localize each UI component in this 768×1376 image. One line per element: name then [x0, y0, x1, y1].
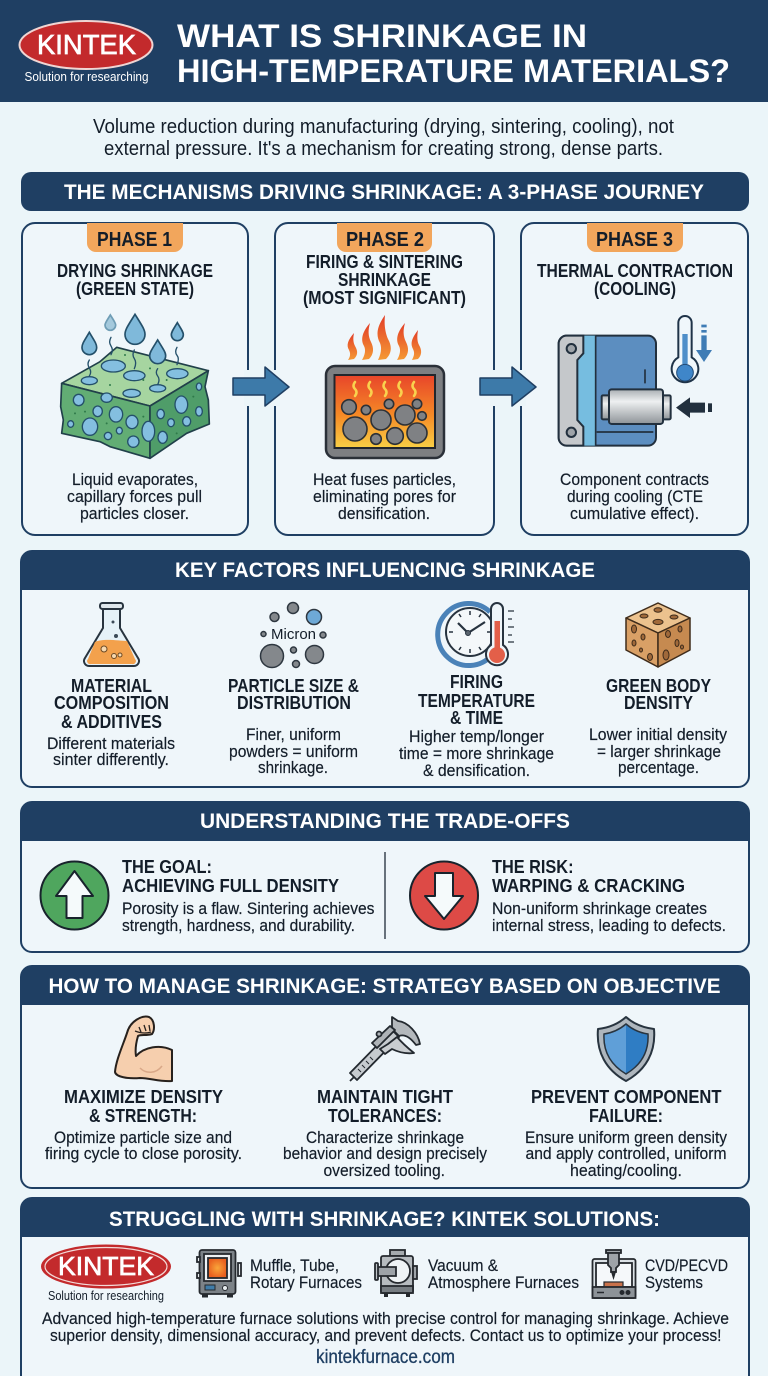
- product label: [645, 1256, 728, 1292]
- goal text: Porosity is a flaw. Sintering achieves: [122, 900, 374, 918]
- strategy text: FAILURE:: [589, 1106, 663, 1126]
- product label: [250, 1256, 362, 1292]
- phase 1 tag: [87, 223, 183, 252]
- risk text: Non-uniform shrinkage creates: [492, 900, 707, 918]
- strategy text: [283, 1087, 488, 1180]
- icon: clock and thermometer: [438, 603, 514, 666]
- icon: down arrow: [410, 862, 478, 930]
- logo: KINTEK small: [41, 1244, 171, 1303]
- product: CVD system: [592, 1250, 728, 1298]
- phase 2 description: eliminating pores for: [313, 488, 456, 506]
- factor text: TEMPERATURE: [418, 691, 535, 711]
- panel: phase 2: [275, 223, 494, 535]
- the risk: [410, 857, 726, 935]
- phase 2 tag: [337, 223, 432, 252]
- phase 3 heading: THERMAL CONTRACTION: [537, 261, 733, 281]
- section heading: mechanisms: [21, 172, 749, 211]
- trade-offs heading: UNDERSTANDING THE TRADE-OFFS: [200, 810, 570, 833]
- strategy: tight tolerances: [283, 1017, 488, 1180]
- logo: KINTEK: Solution for researching: [24, 70, 149, 84]
- strategy text: PREVENT COMPONENT: [531, 1087, 722, 1107]
- strategy text: & STRENGTH:: [89, 1106, 197, 1126]
- phase 1 heading: [57, 261, 213, 299]
- factor text: Different materials: [47, 735, 175, 753]
- strategy text: behavior and design precisely: [283, 1145, 488, 1163]
- product label: Systems: [645, 1273, 703, 1292]
- key factors heading: [21, 551, 749, 590]
- strategy text: firing cycle to close porosity.: [45, 1145, 242, 1163]
- icon: flexed arm: [115, 1017, 172, 1081]
- intro text: [93, 116, 674, 160]
- factor text: Lower initial density: [589, 726, 728, 744]
- title: HIGH-TEMPERATURE MATERIALS?: [177, 53, 730, 89]
- phase 3 description: during cooling (CTE: [567, 488, 703, 506]
- factor: green body density: [589, 603, 728, 777]
- icon: muffle furnace: [197, 1250, 241, 1298]
- icon: shield: [598, 1017, 654, 1081]
- phase 2 heading: FIRING & SINTERING: [306, 252, 463, 272]
- phase 3 tag: PHASE 3: [596, 229, 673, 251]
- strategy text: oversized tooling.: [324, 1162, 445, 1180]
- product label: CVD/PECVD: [645, 1256, 728, 1275]
- arrow: phase 2 to phase 3: [480, 367, 536, 406]
- solutions heading: [21, 1198, 749, 1237]
- strategy text: Optimize particle size and: [54, 1129, 232, 1147]
- factor text: = larger shrinkage: [597, 743, 721, 761]
- website link: kintekfurnace.com: [316, 1347, 455, 1368]
- icon: cooling component: [559, 316, 712, 446]
- logo: KINTEK: KINTEK: [37, 29, 136, 60]
- factor text: & densification.: [423, 762, 530, 780]
- intro text: Volume reduction during manufacturing (drying, sintering, cooling), not: [93, 116, 674, 138]
- factor text: & ADDITIVES: [61, 712, 162, 732]
- factor text: DENSITY: [624, 693, 693, 713]
- factor text: PARTICLE SIZE &: [228, 676, 359, 696]
- product label: Rotary Furnaces: [250, 1273, 362, 1292]
- factor text: [589, 676, 728, 777]
- risk text: [492, 857, 726, 935]
- phase 1 description: [67, 471, 202, 523]
- phase 1 heading: (GREEN STATE): [76, 279, 194, 299]
- logo: KINTEK: [20, 21, 152, 84]
- panel: KINTEK solutions: [21, 1198, 749, 1376]
- the goal: [40, 857, 374, 935]
- strategy text: heating/cooling.: [570, 1162, 682, 1180]
- factor text: [399, 672, 554, 780]
- icon: vacuum furnace: [375, 1250, 417, 1297]
- product: muffle furnace: [197, 1250, 362, 1298]
- factor text: shrinkage.: [258, 759, 328, 777]
- phase 2 heading: [303, 252, 466, 308]
- icon: particles: Micron: [271, 626, 316, 643]
- factor: firing temperature: [399, 603, 554, 780]
- strategy text: Ensure uniform green density: [525, 1129, 728, 1147]
- phase 2 description: [313, 471, 456, 523]
- phase 1 description: Liquid evaporates,: [72, 471, 198, 489]
- strategy text: Characterize shrinkage: [306, 1129, 464, 1147]
- icon: kiln with particles: [326, 366, 444, 458]
- factor: particle size: [228, 602, 359, 777]
- product label: [428, 1256, 579, 1292]
- phase 3 description: cumulative effect).: [570, 505, 699, 523]
- factor text: FIRING: [450, 672, 503, 692]
- phase 1 description: capillary forces pull: [67, 488, 202, 506]
- title: [177, 18, 730, 89]
- risk text: THE RISK:: [492, 857, 574, 877]
- product label: Muffle, Tube,: [250, 1256, 339, 1275]
- phase 3 tag: [587, 223, 683, 252]
- goal text: ACHIEVING FULL DENSITY: [122, 876, 339, 896]
- product label: Atmosphere Furnaces: [428, 1273, 579, 1292]
- factor text: [228, 676, 359, 777]
- strategy: prevent failure: [525, 1017, 728, 1180]
- strategy text: MAINTAIN TIGHT: [317, 1087, 453, 1107]
- phase 2 tag: PHASE 2: [346, 229, 424, 251]
- risk text: internal stress, leading to defects.: [492, 917, 726, 935]
- factor text: powders = uniform: [229, 743, 358, 761]
- strategy: density and strength: [45, 1017, 242, 1163]
- product: vacuum furnace: [375, 1250, 579, 1297]
- strategy text: TOLERANCES:: [328, 1106, 442, 1126]
- solutions description: Advanced high-temperature furnace solutions with precise control for managing shrinkage. Achieve: [42, 1310, 729, 1328]
- managing heading: HOW TO MANAGE SHRINKAGE: STRATEGY BASED ON OBJECTIVE: [48, 975, 720, 998]
- factor text: COMPOSITION: [54, 693, 169, 713]
- panel: phase 1: [22, 223, 248, 535]
- panel: trade-offs: [21, 802, 749, 952]
- icon: CVD system: [592, 1250, 636, 1298]
- logo: KINTEK small: KINTEK: [58, 1251, 155, 1281]
- phase 2 heading: (MOST SIGNIFICANT): [303, 288, 466, 308]
- phase 2 heading: SHRINKAGE: [338, 270, 431, 290]
- icon: particles: [260, 602, 326, 668]
- factor: material composition: [47, 603, 175, 769]
- phase 1 description: particles closer.: [80, 505, 189, 523]
- goal text: [122, 857, 374, 935]
- solutions description: superior density, dimensional accuracy, and prevent defects. Contact us to optimize your process!: [50, 1327, 722, 1345]
- key factors heading: KEY FACTORS INFLUENCING SHRINKAGE: [175, 559, 595, 582]
- arrow: phase 1 to phase 2: [233, 367, 289, 406]
- factor text: sinter differently.: [53, 751, 169, 769]
- factor text: Finer, uniform: [246, 726, 341, 744]
- factor text: DISTRIBUTION: [237, 693, 351, 713]
- solutions heading: STRUGGLING WITH SHRINKAGE? KINTEK SOLUTIONS:: [109, 1208, 660, 1231]
- panel: managing shrinkage: [21, 966, 749, 1188]
- header band: [0, 0, 768, 102]
- factor text: GREEN BODY: [606, 676, 711, 696]
- trade-offs heading: [21, 802, 749, 841]
- section heading: mechanisms: THE MECHANISMS DRIVING SHRINKAGE: A 3-PHASE JOURNEY: [64, 181, 704, 204]
- strategy text: and apply controlled, uniform: [526, 1145, 726, 1163]
- managing heading: [21, 966, 749, 1005]
- phase 3 description: Component contracts: [560, 471, 709, 489]
- factor text: time = more shrinkage: [399, 745, 554, 763]
- icon: flames: [348, 315, 421, 360]
- logo: KINTEK small: Solution for researching: [48, 1289, 164, 1303]
- goal text: THE GOAL:: [122, 857, 212, 877]
- phase 2 description: densification.: [338, 505, 430, 523]
- risk text: WARPING & CRACKING: [492, 876, 685, 896]
- goal text: strength, hardness, and durability.: [122, 917, 355, 935]
- factor text: [47, 676, 175, 769]
- product label: Vacuum &: [428, 1256, 499, 1275]
- panel: key factors: [21, 551, 749, 787]
- icon: drying sponge: [61, 314, 209, 458]
- intro text: external pressure. It's a mechanism for creating strong, dense parts.: [104, 138, 663, 160]
- factor text: MATERIAL: [71, 676, 152, 696]
- strategy text: [525, 1087, 728, 1180]
- icon: caliper: [350, 1017, 420, 1081]
- icon: up arrow: [40, 862, 108, 930]
- title: WHAT IS SHRINKAGE IN: [177, 18, 587, 54]
- factor text: Higher temp/longer: [409, 728, 544, 746]
- icon: flask: [84, 603, 139, 666]
- icon: porous cube: [626, 603, 690, 667]
- phase 1 tag: PHASE 1: [97, 229, 172, 251]
- strategy text: MAXIMIZE DENSITY: [64, 1087, 223, 1107]
- phase 3 heading: (COOLING): [594, 279, 676, 299]
- phase 3 description: [560, 471, 709, 523]
- factor text: & TIME: [450, 708, 503, 728]
- strategy text: [45, 1087, 242, 1163]
- phase 3 heading: [537, 261, 733, 299]
- phase 2 description: Heat fuses particles,: [313, 471, 456, 489]
- panel: phase 3: [521, 223, 748, 535]
- solutions description: [42, 1310, 729, 1345]
- factor text: percentage.: [618, 759, 699, 777]
- phase 1 heading: DRYING SHRINKAGE: [57, 261, 213, 281]
